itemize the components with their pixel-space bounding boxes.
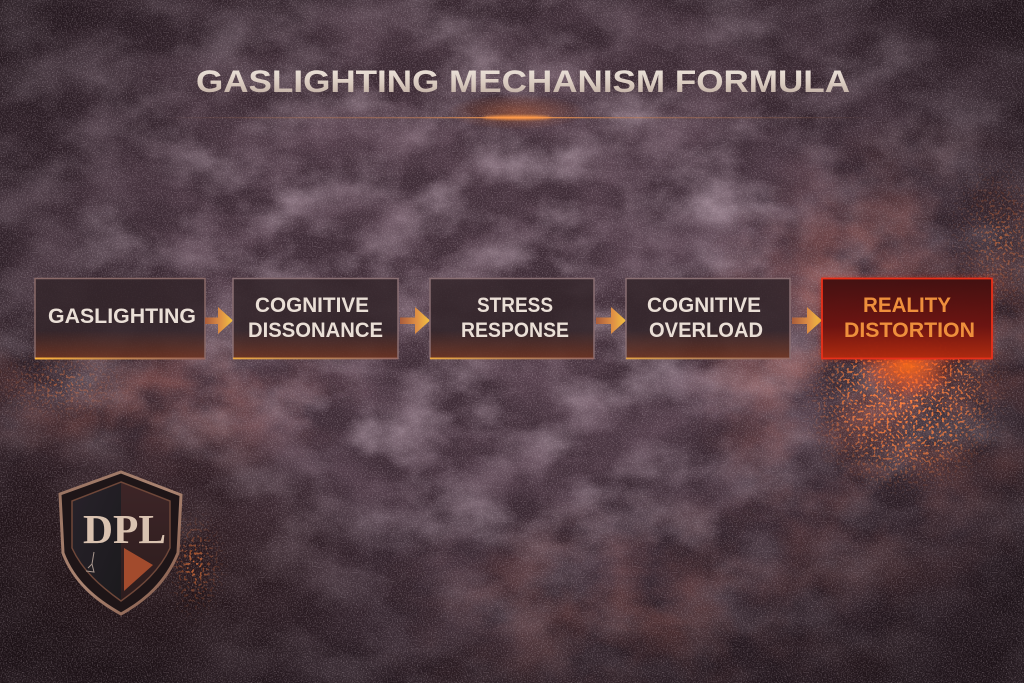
title: GASLIGHTING MECHANISM FORMULA [196, 63, 850, 99]
triangle emblem [124, 548, 153, 591]
step 3: stress response: RESPONSE [461, 319, 569, 342]
DPL shield logo [60, 472, 181, 614]
step 2: cognitive dissonance: COGNITIVE [255, 294, 369, 317]
ember sparks [0, 170, 1024, 614]
step 1: gaslighting: GASLIGHTING [48, 305, 196, 328]
arrow 2 [400, 307, 430, 334]
step 5: reality distortion: REALITY [863, 294, 951, 317]
step 2: cognitive dissonance: DISSONANCE [248, 319, 383, 342]
shield inner outline [72, 482, 170, 601]
compass mark [86, 552, 94, 572]
step 5: reality distortion [822, 278, 992, 358]
step 4: cognitive overload: COGNITIVE [647, 294, 761, 317]
step 4: cognitive overload: OVERLOAD [649, 319, 763, 342]
step 1: gaslighting [35, 278, 205, 360]
arrow 1 [205, 307, 233, 334]
ember glow under final box [850, 340, 966, 398]
arrow 3 [596, 307, 626, 334]
step 2: cognitive dissonance [233, 278, 398, 359]
step 5: reality distortion: DISTORTION [844, 319, 975, 342]
title underline [165, 94, 875, 130]
shield right half [121, 482, 170, 601]
DPL letters: DPL [83, 506, 166, 552]
step 3: stress response [430, 278, 594, 359]
shield left half [72, 482, 121, 601]
step 3: stress response: STRESS [477, 294, 553, 317]
arrow 4 [792, 307, 822, 334]
step 4: cognitive overload [626, 278, 790, 359]
